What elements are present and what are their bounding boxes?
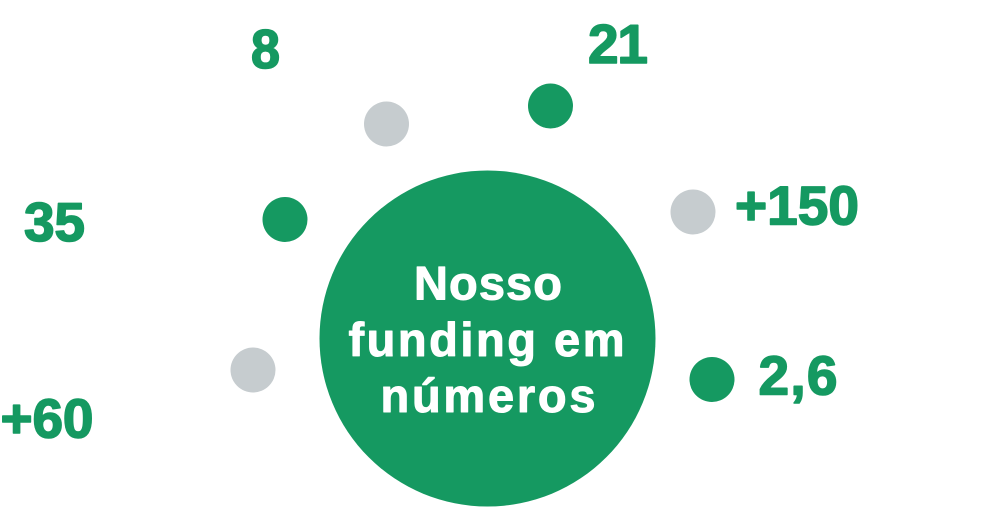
dot: top grey — [364, 102, 409, 146]
dot: lower left grey — [230, 348, 276, 392]
central circle with heading: funding em — [348, 313, 624, 366]
dot: lower right green — [690, 357, 734, 402]
number 8: 8 — [251, 18, 280, 80]
number +150: +150 — [735, 174, 859, 236]
dot: top green — [528, 84, 573, 128]
central circle with heading — [320, 170, 656, 506]
central circle with heading: números — [380, 369, 596, 422]
dot: right grey — [670, 190, 716, 234]
central circle with heading: Nosso — [414, 256, 562, 310]
dot: left green — [262, 197, 308, 242]
number 21: 21 — [588, 13, 648, 75]
number 2,6: 2,6 — [758, 344, 838, 406]
number 35: 35 — [24, 191, 85, 253]
number +60: +60 — [0, 388, 94, 450]
